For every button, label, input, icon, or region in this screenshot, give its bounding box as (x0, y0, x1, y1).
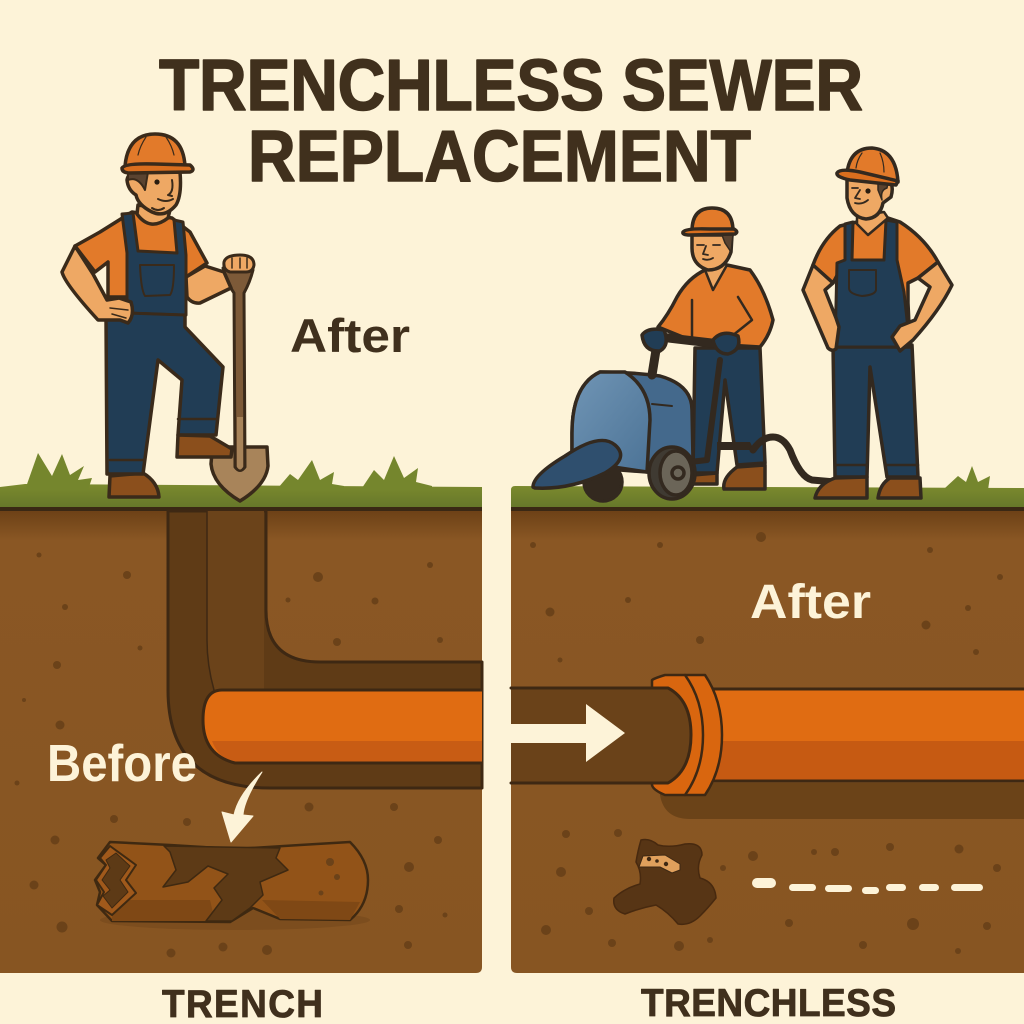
title: REPLACEMENT (248, 115, 751, 197)
bib and straps (835, 220, 910, 347)
grass strip right (511, 486, 1024, 511)
old pipe shadow (100, 910, 370, 930)
panel: trench ground cross-section (0, 453, 482, 973)
pipe collar (652, 675, 722, 795)
shirt (813, 218, 938, 347)
icon: grass tufts left (26, 453, 432, 490)
pipe shadow (660, 783, 1024, 819)
boot: standing (109, 473, 159, 497)
new orange pipe right (700, 689, 1024, 781)
hard hat (122, 134, 193, 173)
machine (533, 329, 835, 501)
shovel (211, 268, 268, 501)
neck and collar (857, 212, 888, 235)
arms and hands (803, 262, 952, 351)
old dark liner pipe (511, 688, 691, 783)
overalls trousers (106, 295, 223, 474)
bib and straps (122, 213, 186, 315)
debris blob (614, 840, 716, 924)
label: Before: Before (47, 735, 197, 793)
arrow: pull direction (500, 704, 625, 762)
worker: centre with machine (533, 208, 835, 501)
boot: raised (177, 435, 232, 457)
dashed white path (752, 878, 983, 894)
soil pebbles (14, 532, 1003, 958)
worker: right standing (803, 148, 952, 498)
boots (815, 477, 921, 498)
label: After (above ground): After (290, 309, 410, 362)
icon: grass tuft right (945, 466, 990, 490)
right arm (186, 266, 231, 303)
hard hat (683, 208, 737, 235)
trousers (833, 345, 918, 477)
shirt and sleeves (658, 265, 773, 347)
new orange pipe left (203, 690, 482, 763)
head (127, 172, 180, 224)
head (847, 178, 892, 219)
label: Trenchless: TRENCHLESS (641, 981, 896, 1024)
head (692, 235, 732, 270)
hard hat (837, 148, 898, 185)
title (159, 44, 863, 197)
trousers (693, 348, 765, 473)
excavated trench (168, 511, 482, 788)
title: TRENCHLESS SEWER (159, 44, 863, 126)
left arm and hand on hip (62, 246, 132, 323)
label: After (underground): After (750, 576, 871, 629)
old broken pipe (95, 842, 368, 922)
arrow: old pipe callout (222, 772, 262, 842)
panel: trenchless ground cross-section (500, 466, 1024, 973)
shirt (75, 212, 207, 297)
hand on shovel (224, 255, 254, 272)
grass strip left (0, 484, 482, 511)
worker: left with shovel (62, 134, 268, 501)
boots (693, 465, 765, 489)
